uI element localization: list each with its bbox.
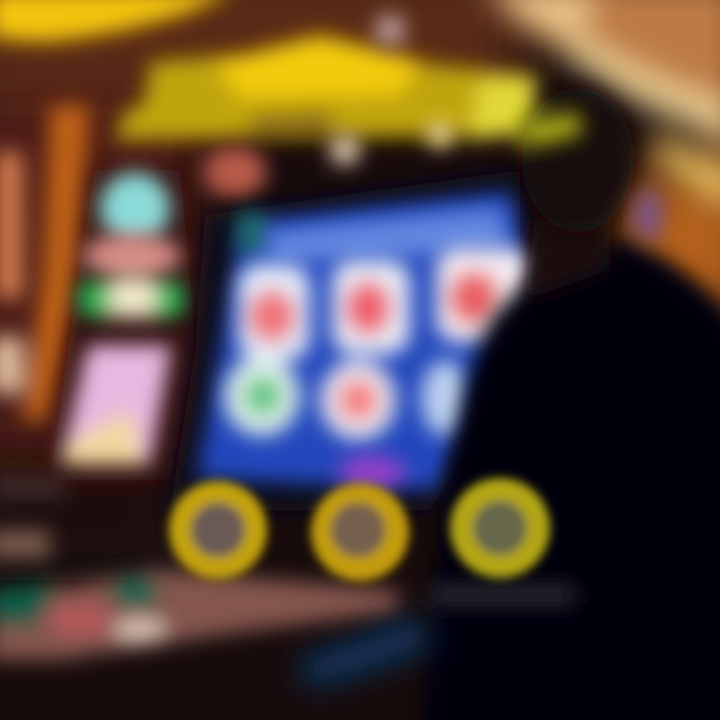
lower left panel [0,475,65,558]
top-left yellow ceiling light [0,0,235,42]
ear highlight [634,189,662,241]
yellow marquee sign [115,35,585,150]
cap brim [520,112,582,148]
body [420,240,720,720]
silhouette of player [420,88,720,720]
table surface [0,570,575,660]
reels [224,248,532,440]
gold chip 2 [311,483,409,581]
reel 2 bottom [320,360,396,440]
screen header [238,208,510,262]
main slot machine [170,170,532,510]
pink band [82,234,182,278]
reel 2 top [332,260,410,354]
green light bar [78,276,186,318]
neck [525,220,610,300]
blue floor glow [295,620,430,685]
left slot machine [50,170,195,480]
marquee lights [203,14,453,198]
top-right ceiling light rays [480,0,720,210]
reel 1 top [238,264,310,360]
gold chip 1 [169,481,267,579]
cyan dome light [99,172,171,244]
blue screen [197,192,525,490]
reel 3 top [436,248,532,342]
gold chip 3 [450,478,550,578]
machine frame [170,170,520,510]
machine cabinet [50,170,195,480]
head [522,88,634,232]
purple glow [338,456,406,488]
left wooden pillar [0,105,90,420]
reel 3 bottom [421,360,469,436]
reel 1 bottom [224,356,300,436]
lavender screen [60,345,172,465]
